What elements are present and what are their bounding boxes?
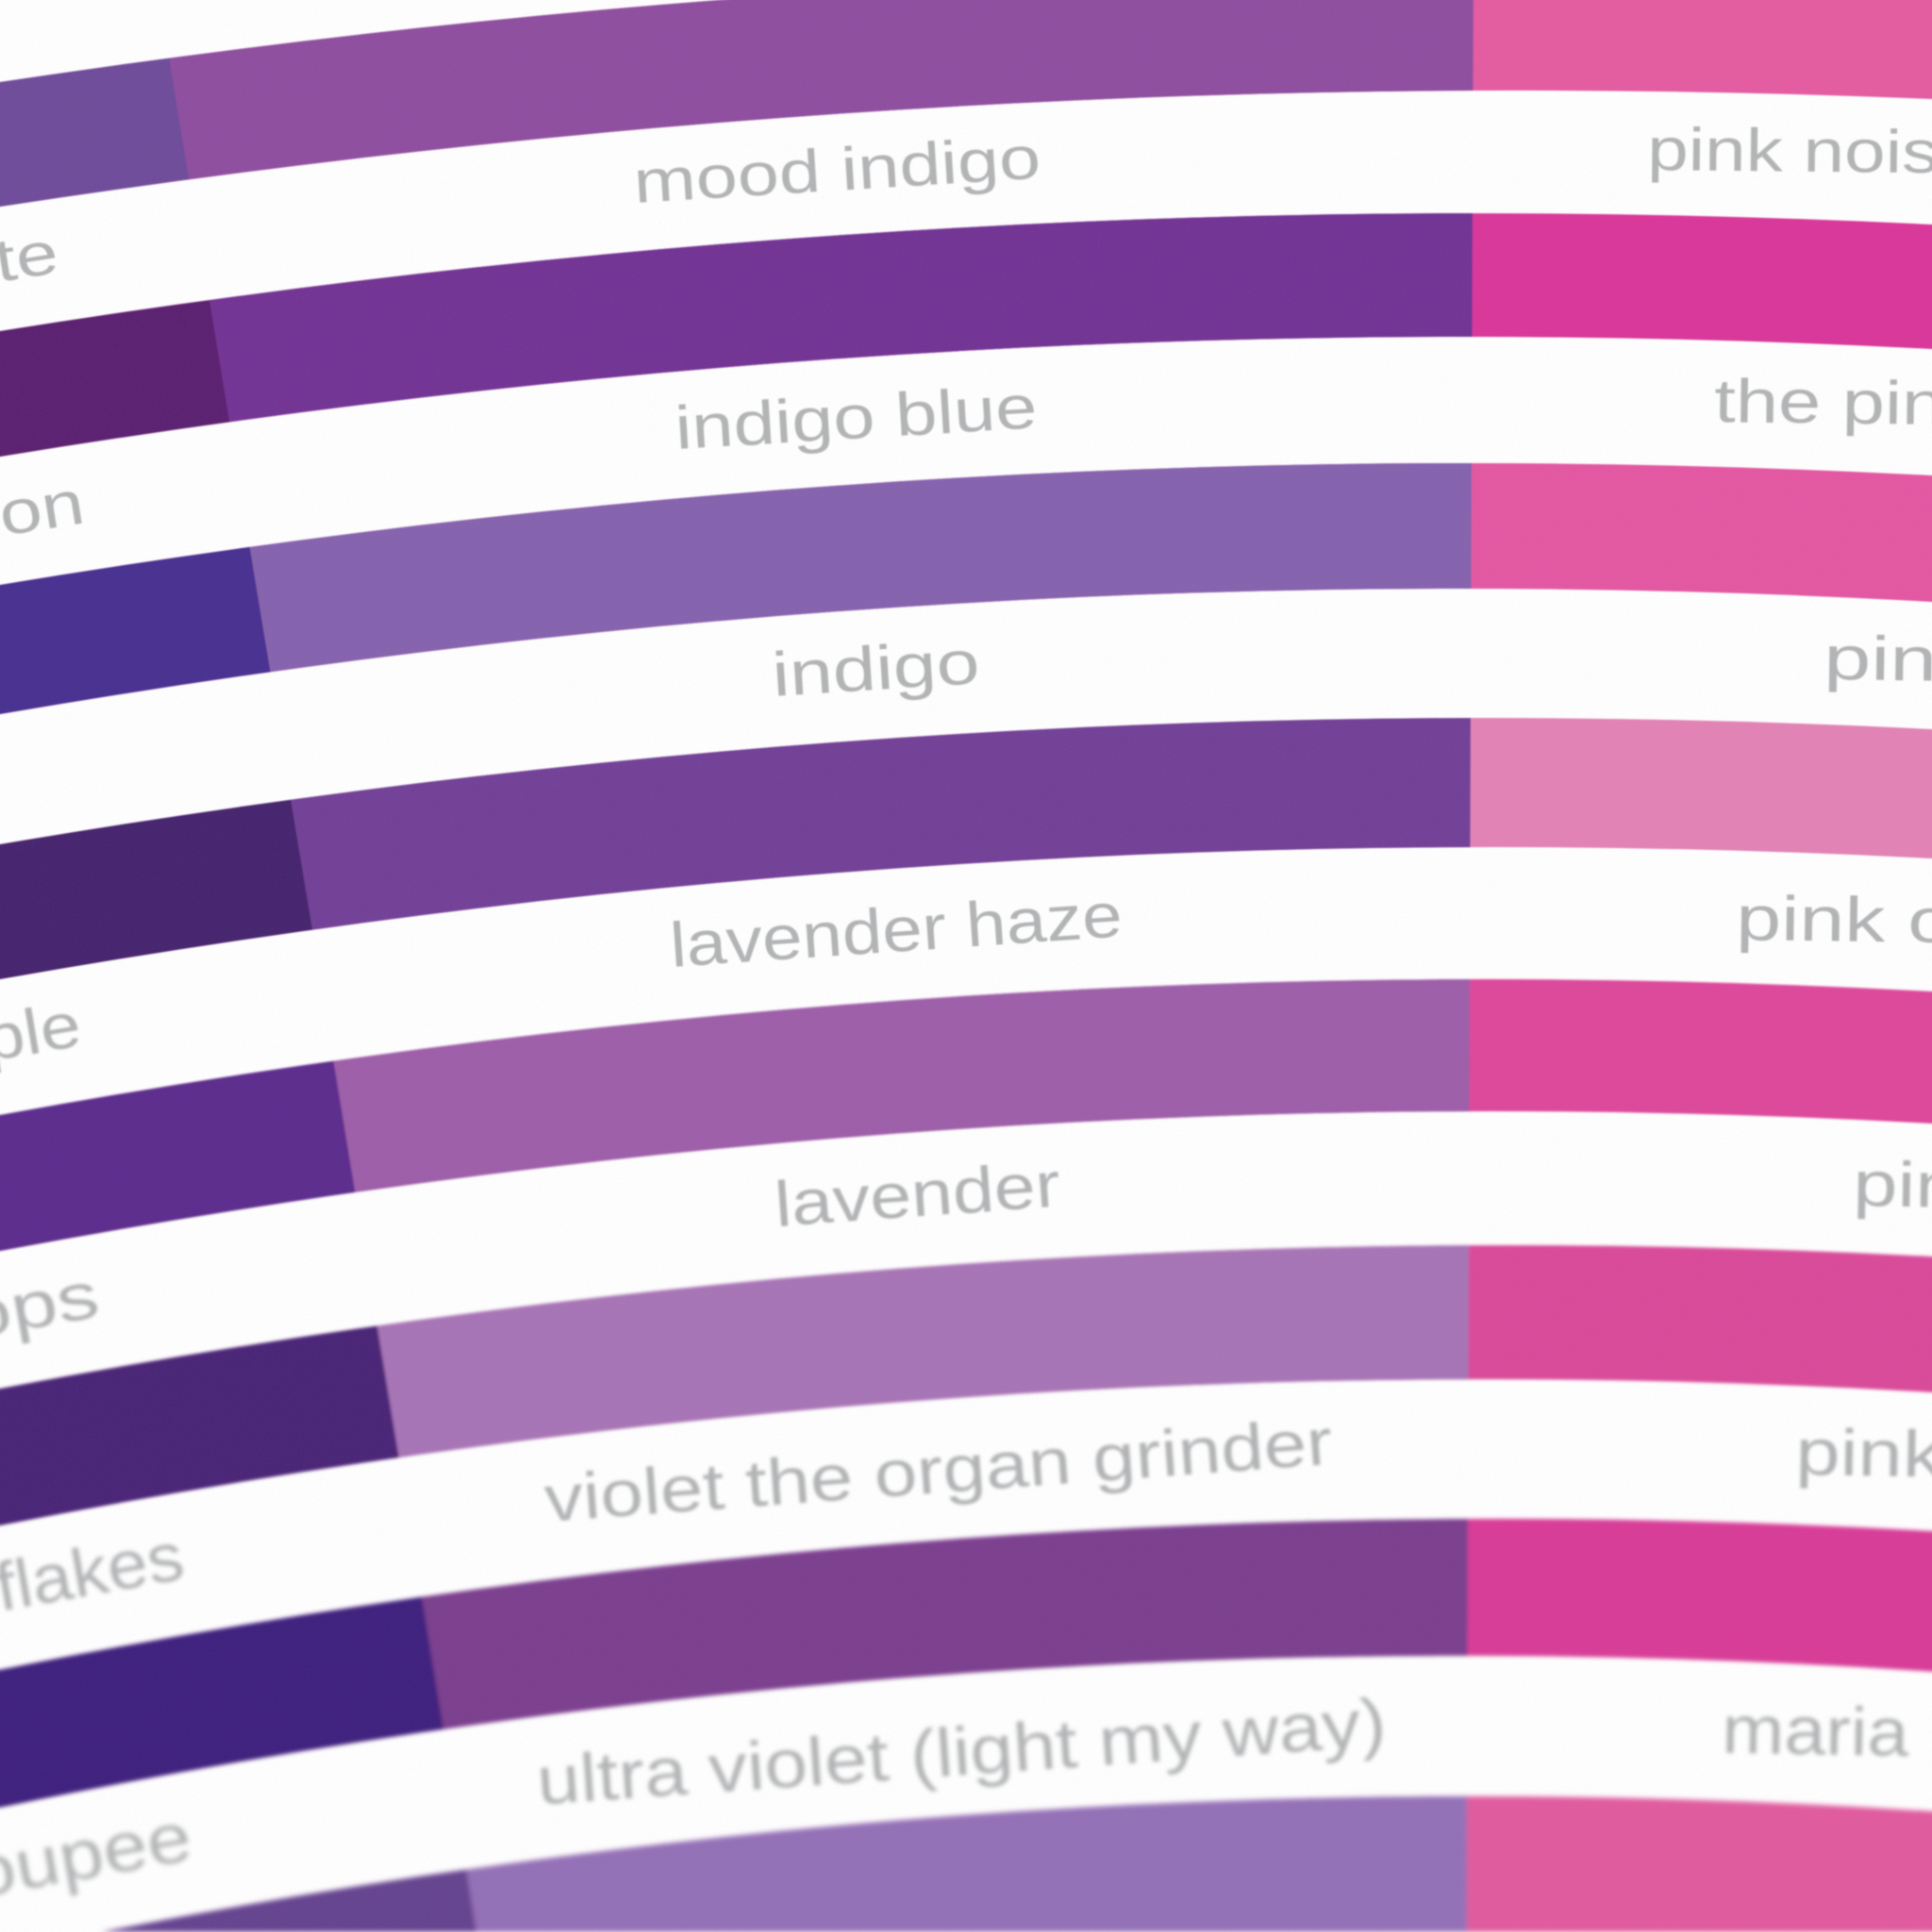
label: lavender haze: lavender haze [668, 879, 1124, 981]
colour band 4 [0, 712, 1932, 995]
colour band 6 [0, 1236, 1932, 1538]
label: pink lower: pink [1795, 1415, 1932, 1491]
label: lavender: lavender [773, 1148, 1062, 1241]
label: the pink: the pin [1714, 366, 1932, 438]
colour band 3 [0, 458, 1932, 731]
label: pink noise: pink nois [1647, 115, 1932, 186]
colour band 5 [0, 972, 1932, 1264]
label: violet the organ grinder: violet the organ grinder [541, 1405, 1335, 1536]
label: pink: pin [1824, 623, 1932, 694]
label: maria: maria [1722, 1692, 1910, 1771]
colour band 1 [0, 0, 1932, 217]
colour band 2 [0, 208, 1932, 472]
colour band 8 [0, 1792, 1932, 1932]
label: pink o: pink o [1736, 883, 1932, 957]
label: ultra violet (light my way): ultra violet (light my way) [535, 1685, 1389, 1820]
label: indigo: indigo [770, 626, 981, 709]
label: mood indigo: mood indigo [631, 124, 1042, 216]
label: indigo blue: indigo blue [674, 372, 1039, 462]
colour band 7 [0, 1509, 1932, 1821]
